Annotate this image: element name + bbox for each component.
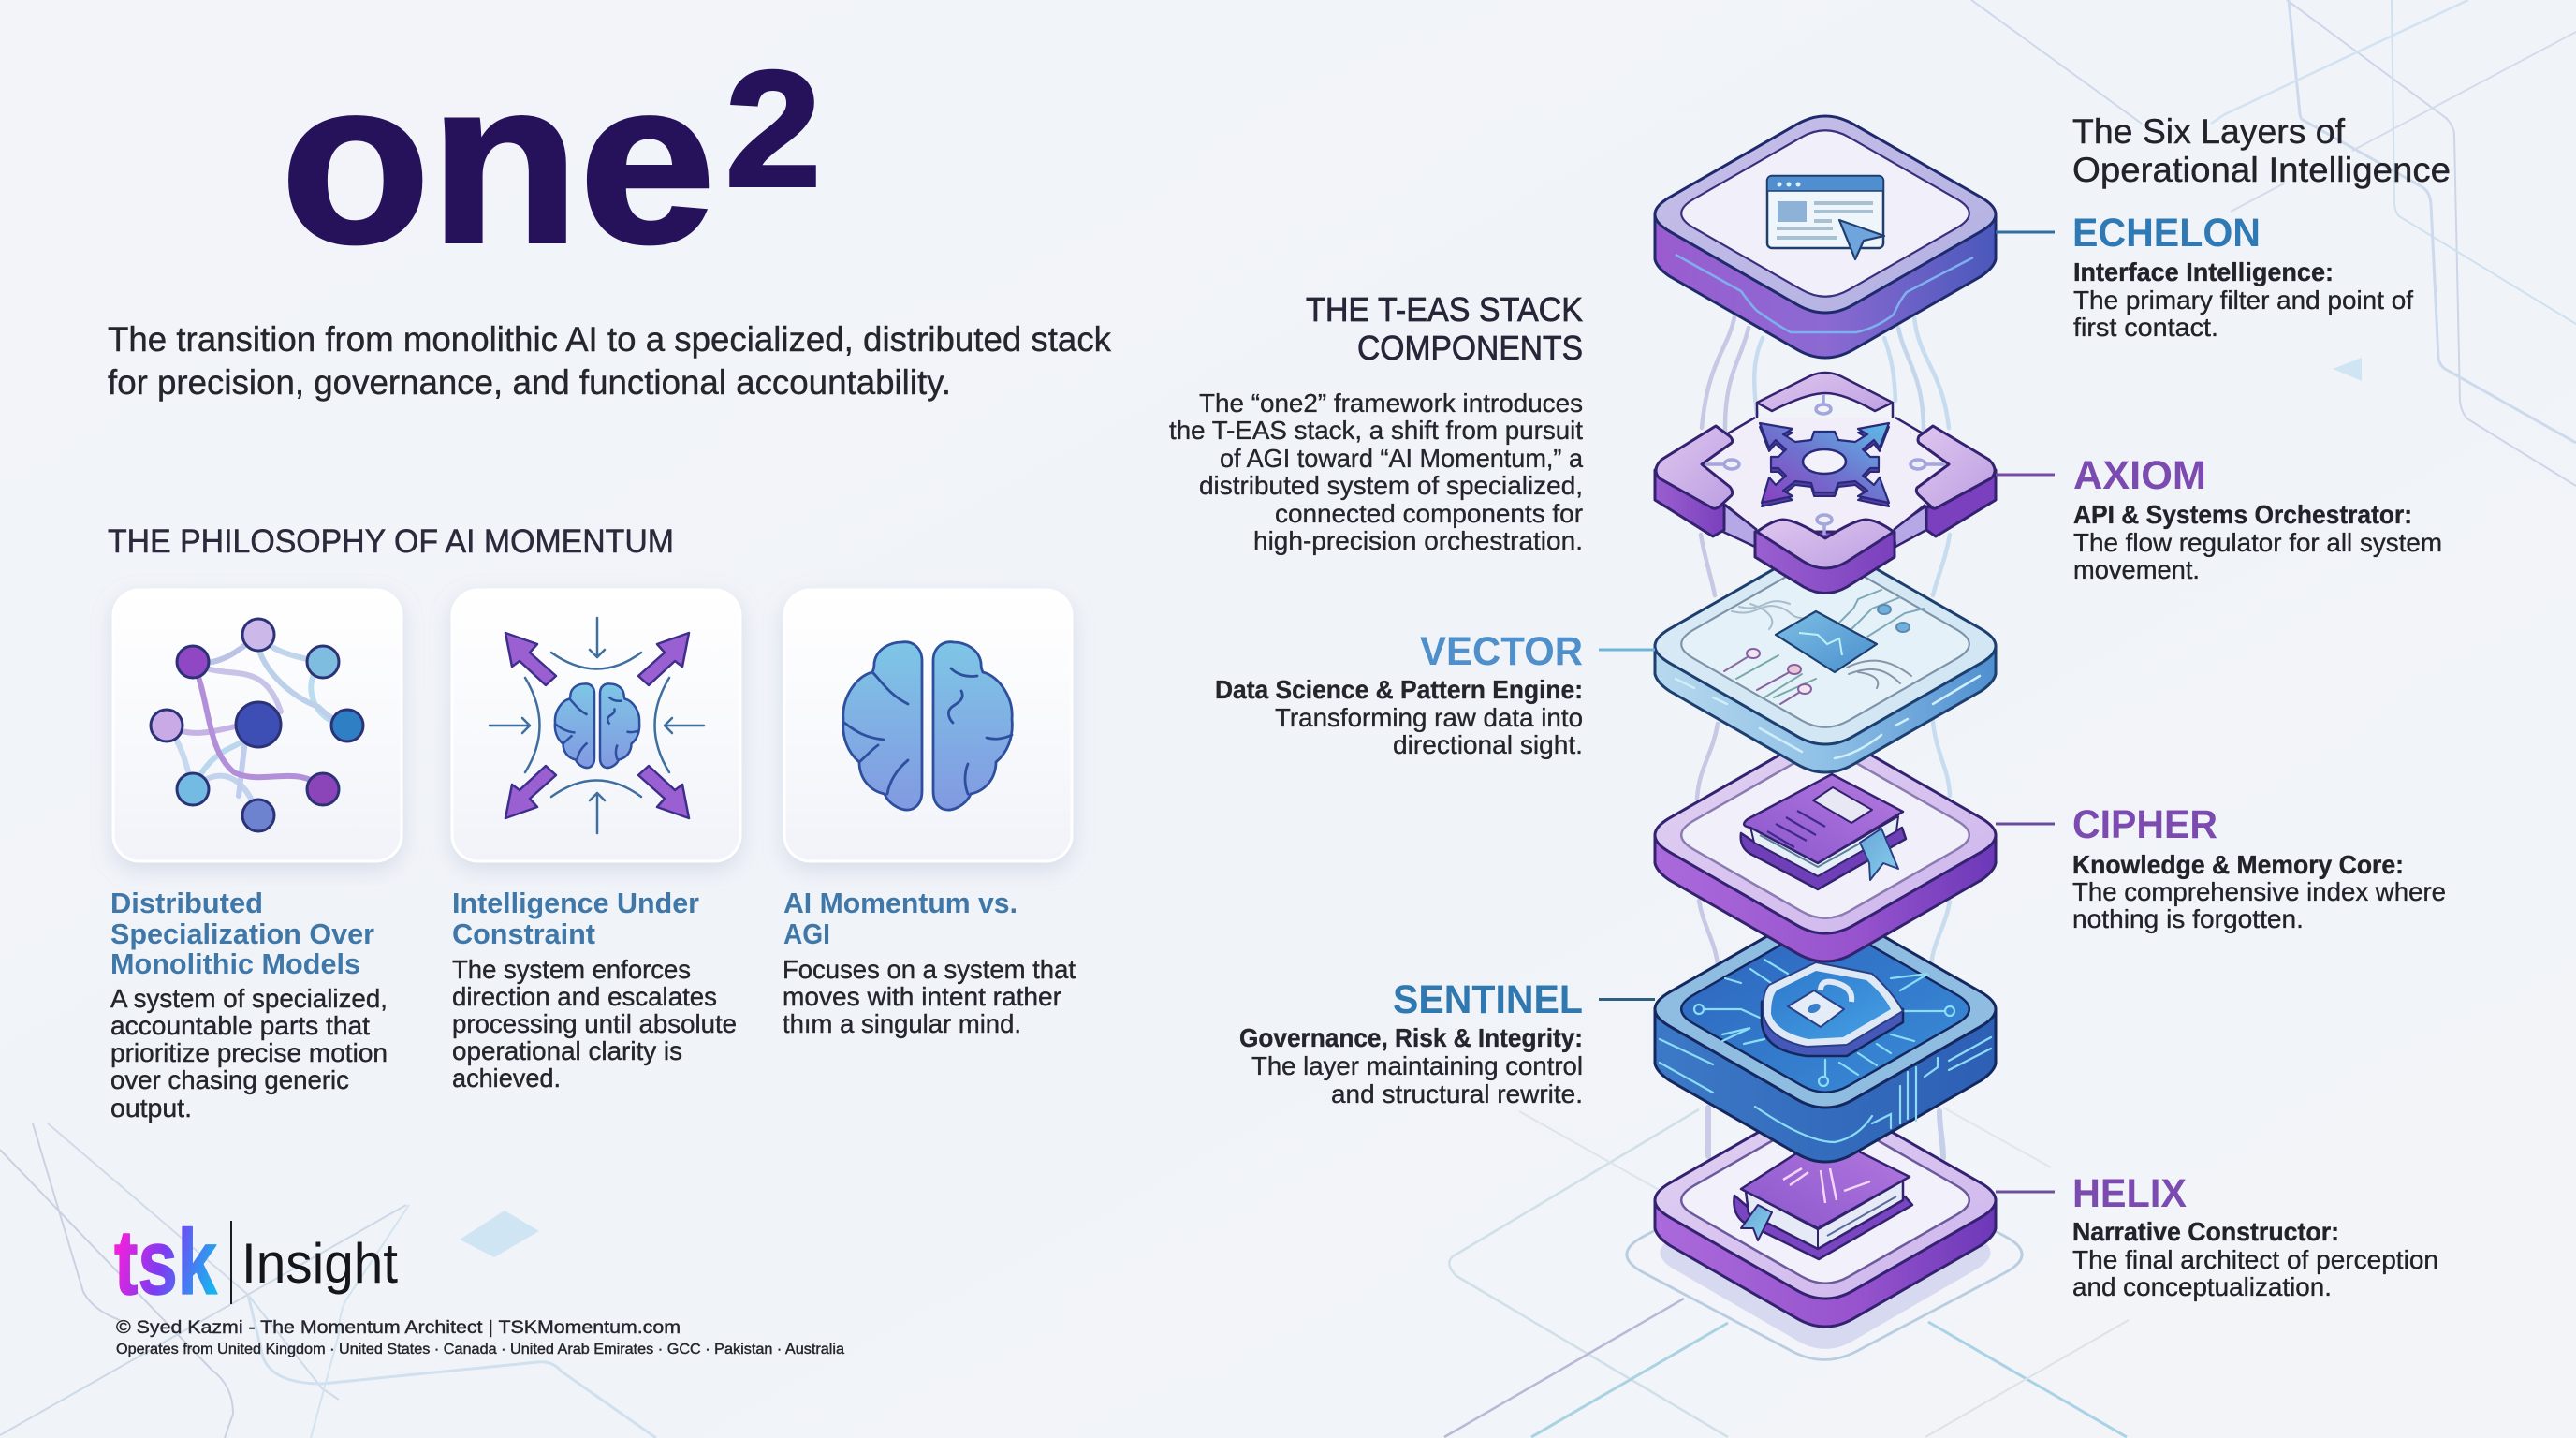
- base plate and shadow: [1627, 1150, 2022, 1359]
- subtitle: for precision, governance, and functional accountability.: [108, 363, 951, 402]
- heading: T-EAS stack components: [1306, 290, 1583, 367]
- icon: distributed network: [151, 619, 363, 831]
- text block: intelligence under constraint: The system enforces: [452, 955, 691, 984]
- connector pins: [1705, 394, 1945, 535]
- text block: AI momentum vs AGI: thım a singular mind.: [783, 1009, 1021, 1038]
- layer text: HELIX: [2072, 1171, 2438, 1301]
- text block: AI momentum vs AGI: [783, 887, 1076, 1038]
- text block: distributed specialization: Monolithic Models: [110, 947, 360, 980]
- layer platform: AXIOM: [1655, 373, 1996, 594]
- layer text: CIPHER: [2072, 802, 2446, 933]
- connector wires behind the stack: [1697, 317, 1950, 1158]
- layer text: CIPHER: The comprehensive index where: [2072, 877, 2446, 906]
- text block: AI momentum vs AGI: AI Momentum vs.: [783, 887, 1017, 919]
- heading: the six layers: [2072, 112, 2451, 189]
- layer text: HELIX: Narrative Constructor:: [2072, 1217, 2339, 1246]
- icon: shield and lock: [1762, 962, 1903, 1056]
- title: one squared: 2: [725, 38, 821, 221]
- layer text: ECHELON: ECHELON: [2072, 211, 2261, 256]
- logo: tsk Insight: tsk: [114, 1211, 217, 1313]
- background circuit lines: bottom left: [0, 1123, 656, 1438]
- layer platform: SENTINEL: [1655, 911, 1996, 1162]
- text block: intelligence under constraint: direction and escalates: [452, 982, 717, 1011]
- heading: philosophy of AI momentum: THE PHILOSOPHY OF AI MOMENTUM: [108, 523, 674, 560]
- logo: tsk Insight: Insight: [242, 1232, 398, 1295]
- layer platform: CIPHER: [1655, 737, 1996, 961]
- text block: T-EAS description: high-precision orchestration.: [1253, 526, 1583, 555]
- plate side glass: [1723, 505, 1926, 547]
- text block: T-EAS description: The “one2” framework introduces: [1199, 389, 1583, 418]
- text block: distributed specialization: over chasing generic: [110, 1065, 349, 1094]
- text block: intelligence under constraint: achieved.: [452, 1064, 561, 1093]
- text block: distributed specialization: Distributed: [110, 887, 263, 919]
- footer text: [116, 1318, 844, 1357]
- layer text: HELIX: The final architect of perception: [2072, 1245, 2438, 1274]
- layer platform: ECHELON: [1655, 116, 1996, 358]
- text block: intelligence under constraint: [452, 887, 737, 1093]
- layer text: CIPHER: Knowledge & Memory Core:: [2072, 850, 2404, 879]
- text block: intelligence under constraint: processing until absolute: [452, 1009, 737, 1038]
- icon: brain under constraint: [490, 618, 704, 833]
- panel: intelligence under constraint card: [452, 590, 740, 861]
- subtitle: [108, 320, 1111, 402]
- layer text: VECTOR: [1215, 629, 1583, 759]
- text block: AI momentum vs AGI: Focuses on a system that: [783, 955, 1076, 984]
- layer text: SENTINEL: SENTINEL: [1393, 977, 1583, 1022]
- text block: distributed specialization: output.: [110, 1093, 192, 1123]
- bottom bracket: [1755, 532, 1895, 594]
- text block: AI momentum vs AGI: AGI: [783, 917, 830, 950]
- icon: gear with arrows: [1760, 423, 1889, 506]
- layer text: VECTOR: Data Science & Pattern Engine:: [1215, 675, 1583, 704]
- layer text: ECHELON: The primary filter and point of: [2073, 286, 2413, 315]
- text block: AI momentum vs AGI: moves with intent rather: [783, 982, 1061, 1011]
- text block: intelligence under constraint: Intelligence Under: [452, 887, 699, 919]
- text block: intelligence under constraint: operational clarity is: [452, 1036, 682, 1065]
- heading: the six layers: Operational Intelligence: [2072, 151, 2451, 189]
- icon: brain: [843, 642, 1012, 810]
- layer text: AXIOM: AXIOM: [2073, 453, 2206, 498]
- panel: AI momentum card: [784, 590, 1072, 861]
- footer text: Operates from United Kingdom · United States · Canada · United Arab Emirates · GCC · Pakistan · Australia: [116, 1342, 844, 1357]
- panel: distributed specialization card: [113, 590, 402, 861]
- text block: distributed specialization: accountable parts that: [110, 1011, 370, 1040]
- text block: distributed specialization: A system of specialized,: [110, 984, 388, 1013]
- icon: browser window and cursor: [1767, 176, 1884, 259]
- text block: T-EAS description: connected components for: [1275, 499, 1583, 528]
- layer text: VECTOR: directional sight.: [1393, 730, 1583, 759]
- text block: T-EAS description: the T-EAS stack, a shift from pursuit: [1169, 416, 1583, 445]
- layer text: HELIX: and conceptualization.: [2072, 1272, 2332, 1301]
- layer text: CIPHER: CIPHER: [2072, 802, 2217, 847]
- layer text: SENTINEL: [1239, 977, 1583, 1108]
- icon: book with bookmark: [1741, 774, 1906, 889]
- layer text: AXIOM: movement.: [2073, 555, 2200, 584]
- text block: T-EAS description: [1169, 389, 1583, 555]
- logo: tsk Insight: [114, 1211, 398, 1313]
- heading: T-EAS stack components: THE T-EAS STACK: [1306, 290, 1583, 329]
- heading: T-EAS stack components: COMPONENTS: [1357, 329, 1583, 367]
- text block: T-EAS description: of AGI toward “AI Momentum,” a: [1220, 444, 1583, 473]
- footer text: © Syed Kazmi - The Momentum Architect | TSKMomentum.com: [116, 1318, 681, 1338]
- layer platform: HELIX: [1627, 1102, 2022, 1359]
- layer text: HELIX: HELIX: [2072, 1171, 2187, 1216]
- circuit traces: [1660, 960, 1991, 1142]
- layer text: VECTOR: Transforming raw data into: [1275, 703, 1583, 732]
- subtitle: The transition from monolithic AI to a specialized, distributed stack: [108, 320, 1111, 359]
- layer text: SENTINEL: and structural rewrite.: [1331, 1079, 1583, 1108]
- text block: T-EAS description: distributed system of specialized,: [1199, 471, 1583, 500]
- right bracket: [1926, 470, 1996, 536]
- layer text: CIPHER: nothing is forgotten.: [2072, 904, 2304, 933]
- central plate: [1702, 418, 1949, 530]
- layer text: SENTINEL: Governance, Risk & Integrity:: [1239, 1023, 1583, 1052]
- circuit traces and chip: [1724, 590, 1924, 704]
- base grid lines below the stack: [1444, 1108, 2129, 1437]
- leader lines: [1599, 232, 2055, 1192]
- layer text: ECHELON: [2072, 211, 2413, 342]
- layer text: VECTOR: VECTOR: [1420, 629, 1583, 674]
- text block: distributed specialization: [110, 887, 388, 1123]
- layer text: SENTINEL: The layer maintaining control: [1251, 1051, 1583, 1080]
- icon: closed book: [1734, 1135, 1912, 1259]
- edge highlights: [1676, 676, 1980, 758]
- layer text: AXIOM: [2073, 453, 2442, 584]
- layer text: AXIOM: API & Systems Orchestrator:: [2073, 500, 2412, 529]
- top bracket: [1757, 373, 1893, 418]
- left bracket: [1655, 470, 1724, 536]
- text block: intelligence under constraint: Constraint: [452, 917, 595, 950]
- text block: distributed specialization: prioritize precise motion: [110, 1038, 388, 1067]
- layer text: AXIOM: The flow regulator for all system: [2073, 528, 2442, 557]
- text block: distributed specialization: Specialization Over: [110, 917, 374, 950]
- background circuit lines: top right: [1971, 0, 2576, 486]
- decorative diamond and triangle: [460, 358, 2362, 1257]
- layer text: ECHELON: Interface Intelligence:: [2073, 257, 2334, 286]
- layer platform: VECTOR: [1655, 548, 1996, 772]
- title: one squared: one: [281, 33, 715, 291]
- layer text: ECHELON: first contact.: [2073, 313, 2218, 342]
- heading: the six layers: The Six Layers of: [2072, 112, 2346, 151]
